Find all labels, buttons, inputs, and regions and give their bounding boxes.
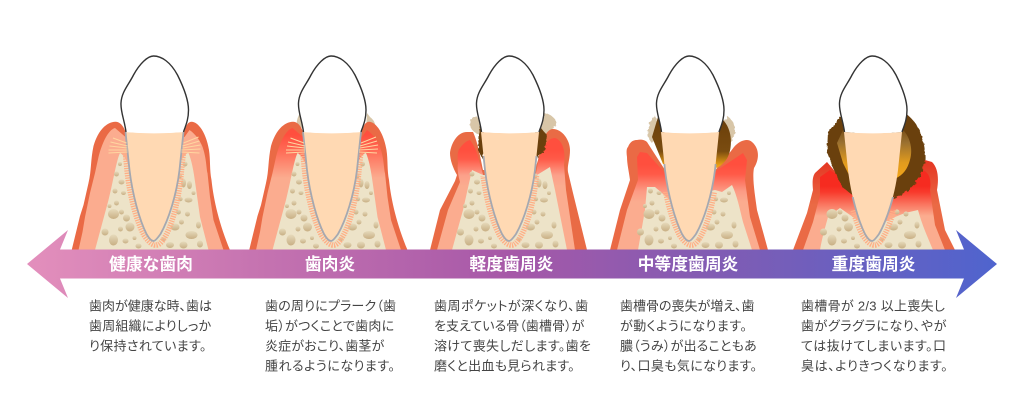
- inflamed gum tissue: [430, 129, 587, 250]
- description: severe: 歯槽骨が 2/3 以上喪失し: [801, 298, 945, 314]
- panel: mild periodontitis tooth illustration: [430, 56, 587, 250]
- description: moderate: が動くようになります。: [620, 318, 747, 334]
- calculus deposits: [648, 116, 735, 143]
- description: moderate: 膿（うみ）が出ることもあ: [620, 338, 757, 354]
- stage label: severe: 重度歯周炎: [832, 255, 916, 274]
- tooth: [476, 56, 544, 245]
- tooth: [108, 56, 200, 245]
- panel: healthy gums tooth illustration: [72, 56, 230, 250]
- calculus deposits: [297, 113, 375, 130]
- alveolar bone: [95, 153, 208, 250]
- description: healthy: り保持されています。: [89, 338, 207, 354]
- alveolar bone: [452, 167, 567, 250]
- stage label: gingivitis: 歯肉炎: [305, 255, 355, 274]
- tooth: [839, 56, 907, 245]
- description: gingivitis: 炎症がおこり、歯茎が: [265, 338, 385, 354]
- description: severe: 臭は、よりきつくなります。: [801, 358, 948, 374]
- dark tartar: [478, 126, 547, 160]
- exposed infected pocket: [837, 130, 911, 180]
- description: mild: 磨くと出血も見られます。: [434, 358, 575, 374]
- description: mild: を支えている骨（歯槽骨）が: [434, 318, 585, 334]
- panel: severe periodontitis tooth illustration: [793, 56, 955, 250]
- description: moderate: り、口臭も気になります。: [620, 358, 757, 374]
- tooth: [286, 56, 378, 245]
- description: mild: 溶けて喪失しだします。歯を: [434, 338, 591, 354]
- stage label: moderate: 中等度歯周炎: [638, 254, 739, 274]
- tooth: [656, 56, 724, 245]
- description: gingivitis: 腫れるようになります。: [265, 358, 395, 374]
- panel: gingivitis tooth illustration: [249, 56, 408, 250]
- description: healthy: 歯肉が健康な時、歯は: [89, 298, 212, 314]
- progression double arrow: [27, 230, 997, 298]
- description: severe: 歯がグラグラになり、やが: [801, 318, 947, 334]
- inflamed gum tissue: [249, 122, 408, 250]
- tartar with pus: [652, 117, 731, 168]
- stage label: mild: 軽度歯周炎: [470, 255, 554, 274]
- inflamed gum tissue: [610, 140, 768, 250]
- gum tissue: [72, 122, 230, 250]
- description: severe: ては抜けてしまいます。口: [801, 338, 947, 354]
- heavy dark tartar: [827, 114, 925, 198]
- stage label: healthy: 健康な歯肉: [109, 255, 193, 274]
- description: moderate: 歯槽骨の喪失が増え、歯: [620, 298, 755, 314]
- description: healthy: 歯周組織によりしっか: [89, 318, 211, 334]
- alveolar bone: [637, 185, 752, 250]
- description: gingivitis: 歯の周りにプラーク（歯: [265, 298, 396, 314]
- description: mild: 歯周ポケットが深くなり、歯: [434, 298, 589, 314]
- alveolar bone: [272, 153, 386, 250]
- severely inflamed gum tissue: [793, 160, 955, 250]
- description: gingivitis: 垢）がつくことで歯肉に: [265, 318, 395, 334]
- alveolar bone: [820, 208, 933, 250]
- calculus deposits: [470, 113, 556, 135]
- panel: moderate periodontitis tooth illustration: [610, 56, 768, 250]
